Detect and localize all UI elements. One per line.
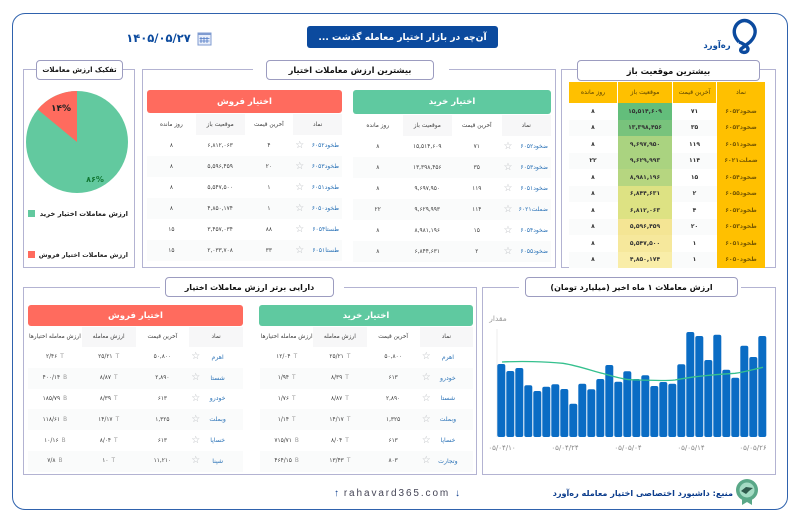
heading — [266, 60, 434, 80]
table: open interest: ۴ — [693, 207, 696, 214]
table: top assets buy: T — [347, 417, 350, 423]
table: top assets buy: ☆ — [422, 455, 431, 466]
table: sell options: ۶,۸۱۲,۰۶۳ — [207, 142, 233, 148]
table: sell options: طخود۶۰۵۱ — [312, 184, 339, 191]
table: top assets buy: ۴۶۴/۱۵ — [274, 458, 292, 464]
table: top assets sell: ۱۴/۱۷ — [98, 417, 113, 423]
table: sell options: ۸ — [170, 142, 173, 148]
table: open interest: ۸ — [591, 124, 595, 131]
table: top assets sell: T — [114, 396, 118, 402]
table: top assets sell: ۴۰۰/۱۴ — [43, 375, 60, 381]
table: top assets buy: شستا — [441, 395, 455, 402]
table: top assets sell: ☆ — [191, 393, 200, 404]
table: open interest: ۱۵ — [691, 174, 698, 181]
panel: highest open interest — [561, 69, 776, 268]
table: open interest: ۱۵,۵۱۴,۶۰۹ — [628, 108, 662, 115]
buy options header: اختیار خرید — [429, 97, 475, 107]
table: buy options: موقعیت باز — [414, 122, 441, 128]
legend text buy: ارزش معاملات اختیار خرید — [40, 210, 128, 218]
logo — [703, 18, 757, 54]
table: top assets sell: ۲,۸۹۰ — [155, 375, 170, 381]
table: top assets buy: ۱,۳۲۵ — [386, 417, 400, 423]
table: top assets buy: ۱۴/۱۷ — [329, 417, 344, 423]
table: sell options: ۸۸ — [266, 226, 272, 232]
table: open interest: طخود۶۰۵۲ — [725, 207, 757, 214]
table: sell options: ☆ — [295, 140, 304, 150]
x axis labels — [488, 444, 767, 452]
table: top assets buy: T — [294, 354, 297, 360]
table: top assets buy: ارزش معامله — [324, 334, 356, 340]
panel: option trade value breakdown — [23, 69, 135, 268]
buy options header: اختیار خرید — [343, 310, 389, 320]
table: top assets buy: T — [345, 375, 349, 381]
table: sell options: ۲,۰۳۳,۷۰۸ — [207, 248, 233, 254]
table: buy options: نماد — [522, 122, 531, 128]
table: top assets buy: T — [347, 458, 350, 464]
table: top assets buy: ۲,۸۹۰ — [386, 396, 400, 402]
table: sell options: ☆ — [295, 202, 304, 214]
buy options header — [259, 305, 473, 326]
table: top assets sell: ☆ — [191, 455, 200, 466]
table: open interest: نماد — [736, 89, 746, 96]
table: open interest: ضخود۶۰۵۵ — [725, 190, 757, 197]
x axis labels: ۰۵/۰۵/۲۶ — [739, 444, 767, 452]
table: buy options: ☆ — [504, 182, 512, 194]
table: top assets buy: ۱/۷۶ — [278, 396, 289, 402]
table: sell options — [160, 120, 339, 256]
pie chart: ۱۴% — [51, 104, 71, 114]
table: top assets sell: نماد — [211, 334, 221, 340]
sell options header: اختیار فروش — [108, 310, 163, 320]
x axis labels: ۰۵/۰۵/۱۴ — [677, 444, 705, 452]
table: open interest — [569, 82, 765, 268]
table: open interest: روز مانده — [581, 89, 605, 96]
heading — [525, 277, 738, 297]
table: top assets sell: ۷/۸ — [47, 458, 55, 464]
table: top assets buy: خودرو — [440, 375, 456, 382]
table: top assets buy: ☆ — [422, 435, 431, 446]
table: top assets sell: اهرم — [212, 354, 224, 361]
bars — [497, 332, 766, 437]
table: top assets sell: ۱۸۵/۷۹ — [43, 396, 60, 402]
table: top assets buy: B — [295, 458, 299, 464]
table: top assets sell: B — [62, 438, 66, 444]
table: open interest: ۱۳,۳۹۸,۴۵۶ — [628, 124, 662, 131]
table: open interest: ۵,۵۴۷,۵۰۰ — [630, 240, 660, 247]
website footer: rahavard365.com — [344, 488, 450, 498]
table: top assets sell: شپنا — [212, 458, 223, 465]
legend: sell options — [28, 251, 128, 259]
table: open interest: ۸ — [591, 240, 595, 247]
table: sell options: طستا۶۰۵۱ — [312, 247, 339, 254]
table: top assets buy: ۸/۰۴ — [331, 438, 342, 444]
table: buy options: ۸ — [376, 144, 379, 150]
table: open interest: ۶,۸۱۲,۰۶۳ — [630, 207, 660, 214]
table: sell options: روز مانده — [160, 122, 183, 128]
table: top assets buy: اهرم — [442, 354, 454, 361]
table: buy options: ۸ — [376, 164, 379, 170]
table: top assets sell: B — [58, 458, 62, 464]
table: buy options: ☆ — [504, 246, 512, 256]
table: top assets buy: T — [345, 438, 349, 444]
table: open interest: ۲۲ — [589, 157, 597, 164]
table: top assets sell: T — [114, 438, 118, 444]
pie chart: ۸۶% — [86, 175, 104, 184]
table: top assets buy: ۷۱۵/۷۱ — [274, 438, 292, 444]
table: buy options: ۲۲ — [375, 206, 381, 212]
website footer: ↓ — [455, 488, 460, 498]
table: top assets sell: ۵۰,۸۰۰ — [154, 354, 171, 360]
table: top assets sell: ۸/۸۷ — [100, 375, 111, 381]
heading — [36, 60, 123, 80]
table: open interest: ۵,۵۹۶,۴۵۹ — [630, 223, 660, 230]
table: sell options: ۸ — [170, 206, 173, 212]
logo name: ره‌آورد — [703, 41, 731, 51]
table: buy options: ضخود۶۰۵۱ — [520, 185, 548, 192]
table: top assets buy: ۸/۸۷ — [331, 396, 342, 402]
table: sell options: طخود۶۰۵۲ — [312, 142, 339, 149]
table: top assets sell: ۲/۴۶ — [46, 354, 57, 360]
table: open interest: ۸ — [591, 108, 595, 115]
table: buy options: ۱۵ — [474, 228, 480, 234]
table: buy options: ۱۵,۵۱۴,۶۰۹ — [413, 144, 442, 150]
table: top assets sell: وبملت — [209, 416, 226, 423]
table: top assets buy: ۱/۱۴ — [278, 417, 289, 423]
table: top assets sell: B — [63, 396, 67, 402]
title banner — [307, 26, 498, 48]
table: sell options: ۸ — [170, 184, 173, 190]
moving average line — [502, 361, 763, 381]
table: top assets sell: خودرو — [210, 395, 226, 402]
heading — [165, 277, 334, 297]
legend swatch buy — [28, 210, 35, 217]
table: top assets sell: ☆ — [191, 414, 200, 425]
table: top assets sell: ۶۱۳ — [158, 396, 167, 402]
table: sell options: آخرین قیمت — [254, 122, 284, 128]
table: top assets buy: ۶۱۳ — [388, 438, 398, 444]
table: sell options: ۲۰ — [266, 164, 272, 170]
table: open interest: ۲۰ — [691, 223, 698, 230]
table: buy options: ۷۱ — [474, 144, 480, 150]
table: top assets sell — [29, 332, 226, 466]
table: sell options: موقعیت باز — [207, 122, 234, 128]
table: buy options: ضملت۶۰۲۱ — [519, 206, 548, 213]
table: top assets buy: T — [292, 375, 296, 381]
table: buy options: ۲ — [475, 248, 478, 254]
table: top assets sell: T — [116, 417, 119, 423]
legend swatch sell — [28, 251, 35, 258]
table: sell options: ۸ — [170, 164, 173, 170]
table: top assets sell: ۶۱۳ — [158, 438, 167, 444]
table: open interest: ۸ — [591, 207, 595, 214]
table: top assets sell: T — [111, 458, 115, 464]
table: sell options: ۵,۵۹۶,۴۵۹ — [207, 164, 233, 170]
table: buy options: ۱۱۴ — [472, 206, 481, 212]
table: top assets sell: ارزش معامله اختیارها — [29, 334, 81, 340]
table: top assets buy: ۱۲/۰۴ — [276, 354, 291, 360]
table: sell options: ۳۳ — [266, 248, 272, 254]
table: top assets sell: ☆ — [191, 435, 200, 446]
table: buy options — [366, 122, 548, 256]
table: buy options: ضخود۶۰۵۳ — [520, 164, 548, 171]
sell options header — [28, 305, 243, 326]
table: top assets sell: ☆ — [191, 351, 200, 362]
table: buy options: ☆ — [504, 162, 512, 172]
table: top assets sell: خساپا — [210, 437, 225, 444]
sell options header — [147, 90, 342, 113]
table: top assets buy: ۶۱۳ — [388, 375, 398, 381]
table: top assets buy: B — [295, 438, 299, 444]
table: buy options: ۳۵ — [474, 164, 480, 170]
table: open interest: ۷۱ — [691, 108, 698, 115]
table: buy options: ☆ — [504, 204, 512, 214]
table: top assets sell: B — [63, 375, 67, 381]
table: open interest: طخود۶۰۵۳ — [725, 223, 757, 230]
date: ۱۴۰۵/۰۵/۲۷ — [126, 31, 191, 45]
table: open interest: طخود۶۰۵۱ — [725, 240, 757, 247]
table: top assets sell: ۱۰ — [102, 458, 108, 464]
source text: منبع: داشبورد اختصاصی اختیار معامله ره‌آورد — [553, 488, 733, 498]
legend: buy options — [28, 210, 128, 218]
table: buy options: ضخود۶۰۵۵ — [520, 248, 548, 255]
table: sell options: ☆ — [295, 160, 304, 172]
table: top assets buy: ارزش معامله اختیارها — [261, 334, 313, 340]
table: buy options: ۹,۶۲۹,۹۹۳ — [415, 206, 440, 212]
panel: highest option trade value — [142, 69, 556, 268]
table: buy options: روز مانده — [366, 122, 389, 128]
table: open interest: ۹,۶۹۷,۹۵۰ — [630, 141, 660, 148]
table: top assets buy: ۸/۳۹ — [331, 375, 342, 381]
table: top assets buy: ☆ — [422, 372, 431, 383]
title banner: آن‌چه در بازار اختیار معامله گذشت ... — [318, 32, 487, 42]
table: open interest: ۴,۸۵۰,۱۷۴ — [630, 256, 660, 263]
table: open interest: موقعیت باز — [631, 89, 659, 96]
table: buy options: آخرین قیمت — [462, 122, 492, 128]
panel: top underlying assets — [23, 287, 477, 475]
x axis labels: ۰۵/۰۴/۱۰ — [488, 444, 516, 452]
table: buy options: ☆ — [504, 140, 512, 152]
table: buy options: ۱۱۹ — [472, 186, 481, 192]
bar and line chart — [488, 314, 767, 452]
icon: calendar — [198, 32, 212, 46]
table: sell options: طستا۶۰۵۴ — [312, 226, 339, 233]
table: sell options: طخود۶۰۵۰ — [312, 205, 339, 212]
table: open interest: ضخود۶۰۵۲ — [725, 108, 757, 115]
table: open interest: ضخود۶۰۵۳ — [725, 124, 757, 131]
table: top assets sell: T — [116, 354, 119, 360]
table: open interest: ۲ — [693, 190, 696, 197]
table: top assets buy: آخرین قیمت — [378, 334, 408, 340]
table: top assets buy: خساپا — [440, 437, 455, 444]
table: top assets buy: ۱/۹۴ — [278, 375, 289, 381]
table: top assets sell: ۱۰/۱۶ — [44, 438, 59, 444]
table: open interest: ۹,۶۲۹,۹۹۳ — [630, 157, 660, 164]
table: sell options: ☆ — [295, 244, 304, 256]
table: buy options: ۶,۸۴۴,۶۳۱ — [415, 248, 440, 254]
table: top assets sell: ارزش معامله — [93, 334, 125, 340]
table: buy options: ۸,۹۸۱,۱۹۶ — [415, 228, 440, 234]
table: sell options: ☆ — [295, 224, 304, 234]
table: open interest: ۸ — [591, 223, 595, 230]
heading — [577, 60, 760, 81]
panel: one month trade value — [482, 287, 776, 475]
table: top assets buy: ☆ — [422, 351, 431, 362]
table: top assets buy: ۸۰۳ — [388, 458, 398, 464]
table: buy options: ۸ — [376, 228, 379, 234]
table: top assets buy: T — [345, 396, 349, 402]
table: open interest: ۸ — [591, 174, 595, 181]
icon: logo loop — [732, 18, 757, 54]
table: top assets sell: ۱۱۸/۶۱ — [43, 417, 60, 423]
table: top assets buy: وتجارت — [438, 458, 458, 465]
table: top assets buy — [261, 332, 458, 466]
table: top assets buy: T — [292, 417, 296, 423]
table: buy options: ۸ — [376, 186, 379, 192]
table: top assets sell: ۲۵/۲۱ — [98, 354, 113, 360]
icon: award badge — [736, 479, 758, 505]
table: open interest: ۳۵ — [691, 124, 698, 131]
table: open interest: ۶,۸۴۴,۶۳۱ — [630, 190, 660, 197]
table: top assets buy: وبملت — [440, 416, 456, 423]
table: sell options: طخود۶۰۵۳ — [312, 163, 339, 170]
table: top assets sell: B — [63, 417, 67, 423]
table: top assets sell: T — [60, 354, 64, 360]
heading: بیشترین ارزش معاملات اختیار — [289, 65, 411, 75]
table: open interest: ۸,۹۸۱,۱۹۶ — [630, 174, 660, 181]
table: open interest: ۱۱۴ — [689, 157, 700, 164]
table: open interest: ضملت۶۰۲۱ — [724, 157, 758, 164]
table: top assets buy: ۵۰,۸۰۰ — [384, 354, 402, 360]
table: sell options: ۱۵ — [168, 248, 174, 254]
table: buy options: ضخود۶۰۵۴ — [520, 227, 548, 234]
table: open interest: ۱ — [693, 240, 696, 247]
table: sell options: ۱۵ — [168, 226, 174, 232]
table: top assets sell: شستا — [210, 375, 225, 382]
x axis labels: ۰۵/۰۵/۰۴ — [614, 444, 642, 452]
table: top assets sell: ۱۱,۲۱۰ — [154, 458, 171, 464]
table: top assets sell: ۸/۰۴ — [100, 438, 111, 444]
table: top assets buy: T — [292, 396, 296, 402]
table: top assets buy: ☆ — [422, 393, 431, 404]
sell options header: اختیار فروش — [217, 96, 272, 106]
table: open interest: ۱۱۹ — [689, 141, 700, 148]
table: sell options: ۳,۴۵۷,۰۳۴ — [207, 226, 233, 232]
table: top assets buy: ☆ — [422, 414, 431, 425]
table: open interest: ضخود۶۰۵۴ — [725, 174, 757, 181]
table: sell options: ۱ — [267, 184, 270, 190]
table: top assets sell: آخرین قیمت — [147, 334, 177, 340]
heading: بیشترین موقعیت باز — [627, 66, 710, 76]
table: open interest: ضخود۶۰۵۱ — [725, 141, 757, 148]
x axis labels: ۰۵/۰۴/۲۴ — [551, 444, 579, 452]
table: top assets sell: ۱,۳۲۵ — [155, 417, 170, 423]
table: buy options: ضخود۶۰۵۲ — [520, 143, 548, 150]
table: buy options: ۹,۶۹۷,۹۵۰ — [415, 186, 440, 192]
table: buy options: ☆ — [504, 224, 512, 236]
buy options header — [353, 90, 551, 114]
table: sell options: ۴,۸۵۰,۱۷۴ — [207, 206, 233, 212]
website footer: ↑ — [334, 488, 339, 498]
heading: دارایی برتر ارزش معاملات اختیار — [185, 282, 314, 292]
table: open interest: طخود۶۰۵۰ — [725, 256, 757, 263]
table: open interest: آخرین قیمت — [679, 89, 710, 96]
table: buy options: ۱۳,۳۹۸,۴۵۶ — [413, 164, 442, 170]
table: sell options: ۱ — [267, 206, 270, 212]
table: sell options: ۴ — [267, 142, 270, 148]
pie chart — [26, 91, 128, 193]
table: top assets buy: ۱۳/۴۳ — [329, 458, 344, 464]
table: open interest: ۸ — [591, 190, 595, 197]
bar and line chart: مقدار — [488, 314, 507, 323]
heading: ارزش معاملات ۱ ماه اخیر (میلیارد تومان) — [550, 282, 713, 292]
legend text sell: ارزش معاملات اختیار فروش — [39, 251, 128, 259]
table: sell options: نماد — [313, 122, 322, 128]
table: buy options: ۸ — [376, 248, 379, 254]
table: open interest: ۸ — [591, 141, 595, 148]
table: top assets sell: ☆ — [191, 372, 200, 383]
heading: تفکیک ارزش معاملات — [42, 66, 117, 74]
table: top assets buy: T — [347, 354, 350, 360]
table: open interest: ۱ — [693, 256, 696, 263]
table: top assets buy: نماد — [442, 334, 451, 340]
table: sell options: ۵,۵۴۷,۵۰۰ — [207, 184, 233, 190]
table: sell options: ☆ — [295, 182, 304, 192]
table: top assets sell: ۸/۳۹ — [100, 396, 111, 402]
table: top assets buy: ۲۵/۲۱ — [329, 354, 344, 360]
table: open interest: ۸ — [591, 256, 595, 263]
table: top assets sell: T — [114, 375, 118, 381]
